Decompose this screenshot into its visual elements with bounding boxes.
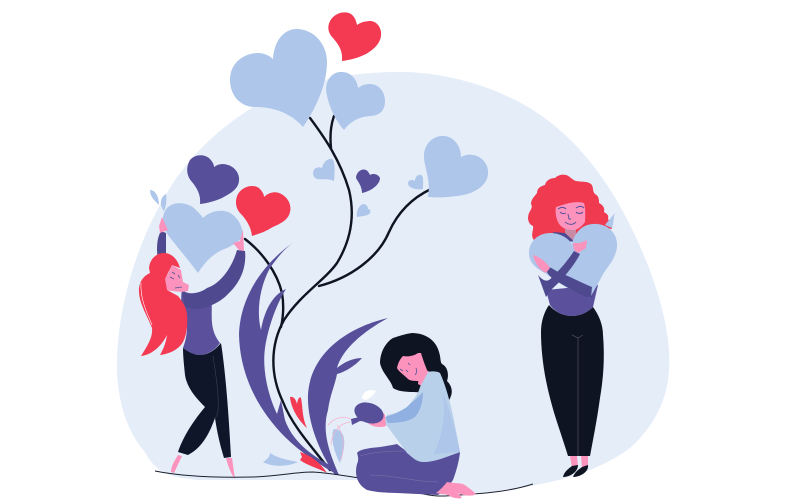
heart: purple left <box>187 155 239 204</box>
heart: small blue left <box>313 159 335 181</box>
left woman: face details <box>170 272 182 288</box>
left woman: torso <box>181 287 220 355</box>
watering can <box>351 390 386 427</box>
left woman: hair <box>139 253 187 356</box>
right woman: shoes <box>563 465 588 477</box>
sitting woman: feet <box>436 482 476 498</box>
right woman: pants <box>541 305 604 456</box>
sitting woman: neck <box>418 365 432 388</box>
watering can: white cap <box>362 390 376 400</box>
left woman: raised arm <box>157 231 166 266</box>
sitting woman: sleeve shade <box>385 392 423 423</box>
heart: tiny blue right <box>408 175 423 189</box>
right woman: blue sprout <box>605 213 615 228</box>
heart: tiny blue center <box>357 204 370 217</box>
heart: red left <box>236 186 290 236</box>
left woman: hands <box>159 217 244 251</box>
right woman: hands <box>533 240 587 273</box>
plant: left leaf <box>239 242 338 475</box>
background blob <box>117 72 669 495</box>
right woman: collar <box>553 232 575 242</box>
sitting woman: pants seams <box>360 451 438 482</box>
plant: light blue leaf and water arcs <box>328 417 352 463</box>
heart: large blue <box>230 29 327 127</box>
left woman: raised arm right <box>182 250 245 309</box>
heart: right blue <box>424 136 488 197</box>
left woman: pants <box>178 343 231 458</box>
sitting woman: hand <box>368 410 386 427</box>
sitting woman: hair <box>380 333 452 405</box>
right woman: neck <box>565 226 576 240</box>
heart: small purple <box>356 169 380 193</box>
left woman: pants seam <box>213 356 218 418</box>
sitting woman: pants <box>356 444 460 495</box>
left woman <box>139 190 245 479</box>
heart: top red <box>328 12 381 61</box>
right woman: pants seam <box>572 335 583 456</box>
sitting woman: face details <box>400 363 417 375</box>
plant: blue splash <box>263 453 298 466</box>
right woman: feet <box>570 456 588 468</box>
right woman: hair <box>528 175 612 240</box>
plant stems <box>245 116 431 470</box>
left woman: blue sprout <box>150 190 166 211</box>
left woman: hair highlight <box>141 283 152 325</box>
right woman: upper arm right <box>586 266 603 298</box>
sitting woman: sweater shade <box>434 393 460 454</box>
plant: right leaf <box>308 318 388 475</box>
right woman: face <box>556 202 585 230</box>
ground line <box>155 471 533 496</box>
right woman: torso <box>546 285 598 316</box>
sitting woman: face <box>397 353 427 381</box>
right woman: crossed arms <box>538 251 592 298</box>
right woman <box>528 175 617 477</box>
sitting woman: sweater <box>385 371 460 462</box>
sitting woman <box>351 333 476 498</box>
plant: bottom red leaf <box>300 452 327 473</box>
right woman: face details <box>558 206 584 224</box>
plant: small red leaf <box>290 397 307 428</box>
right woman: hugged blue heart <box>529 224 617 298</box>
left woman: held blue heart <box>163 203 243 273</box>
heart: medium blue <box>326 72 385 130</box>
left woman: feet <box>171 455 235 479</box>
left woman: neck and face <box>163 265 189 292</box>
